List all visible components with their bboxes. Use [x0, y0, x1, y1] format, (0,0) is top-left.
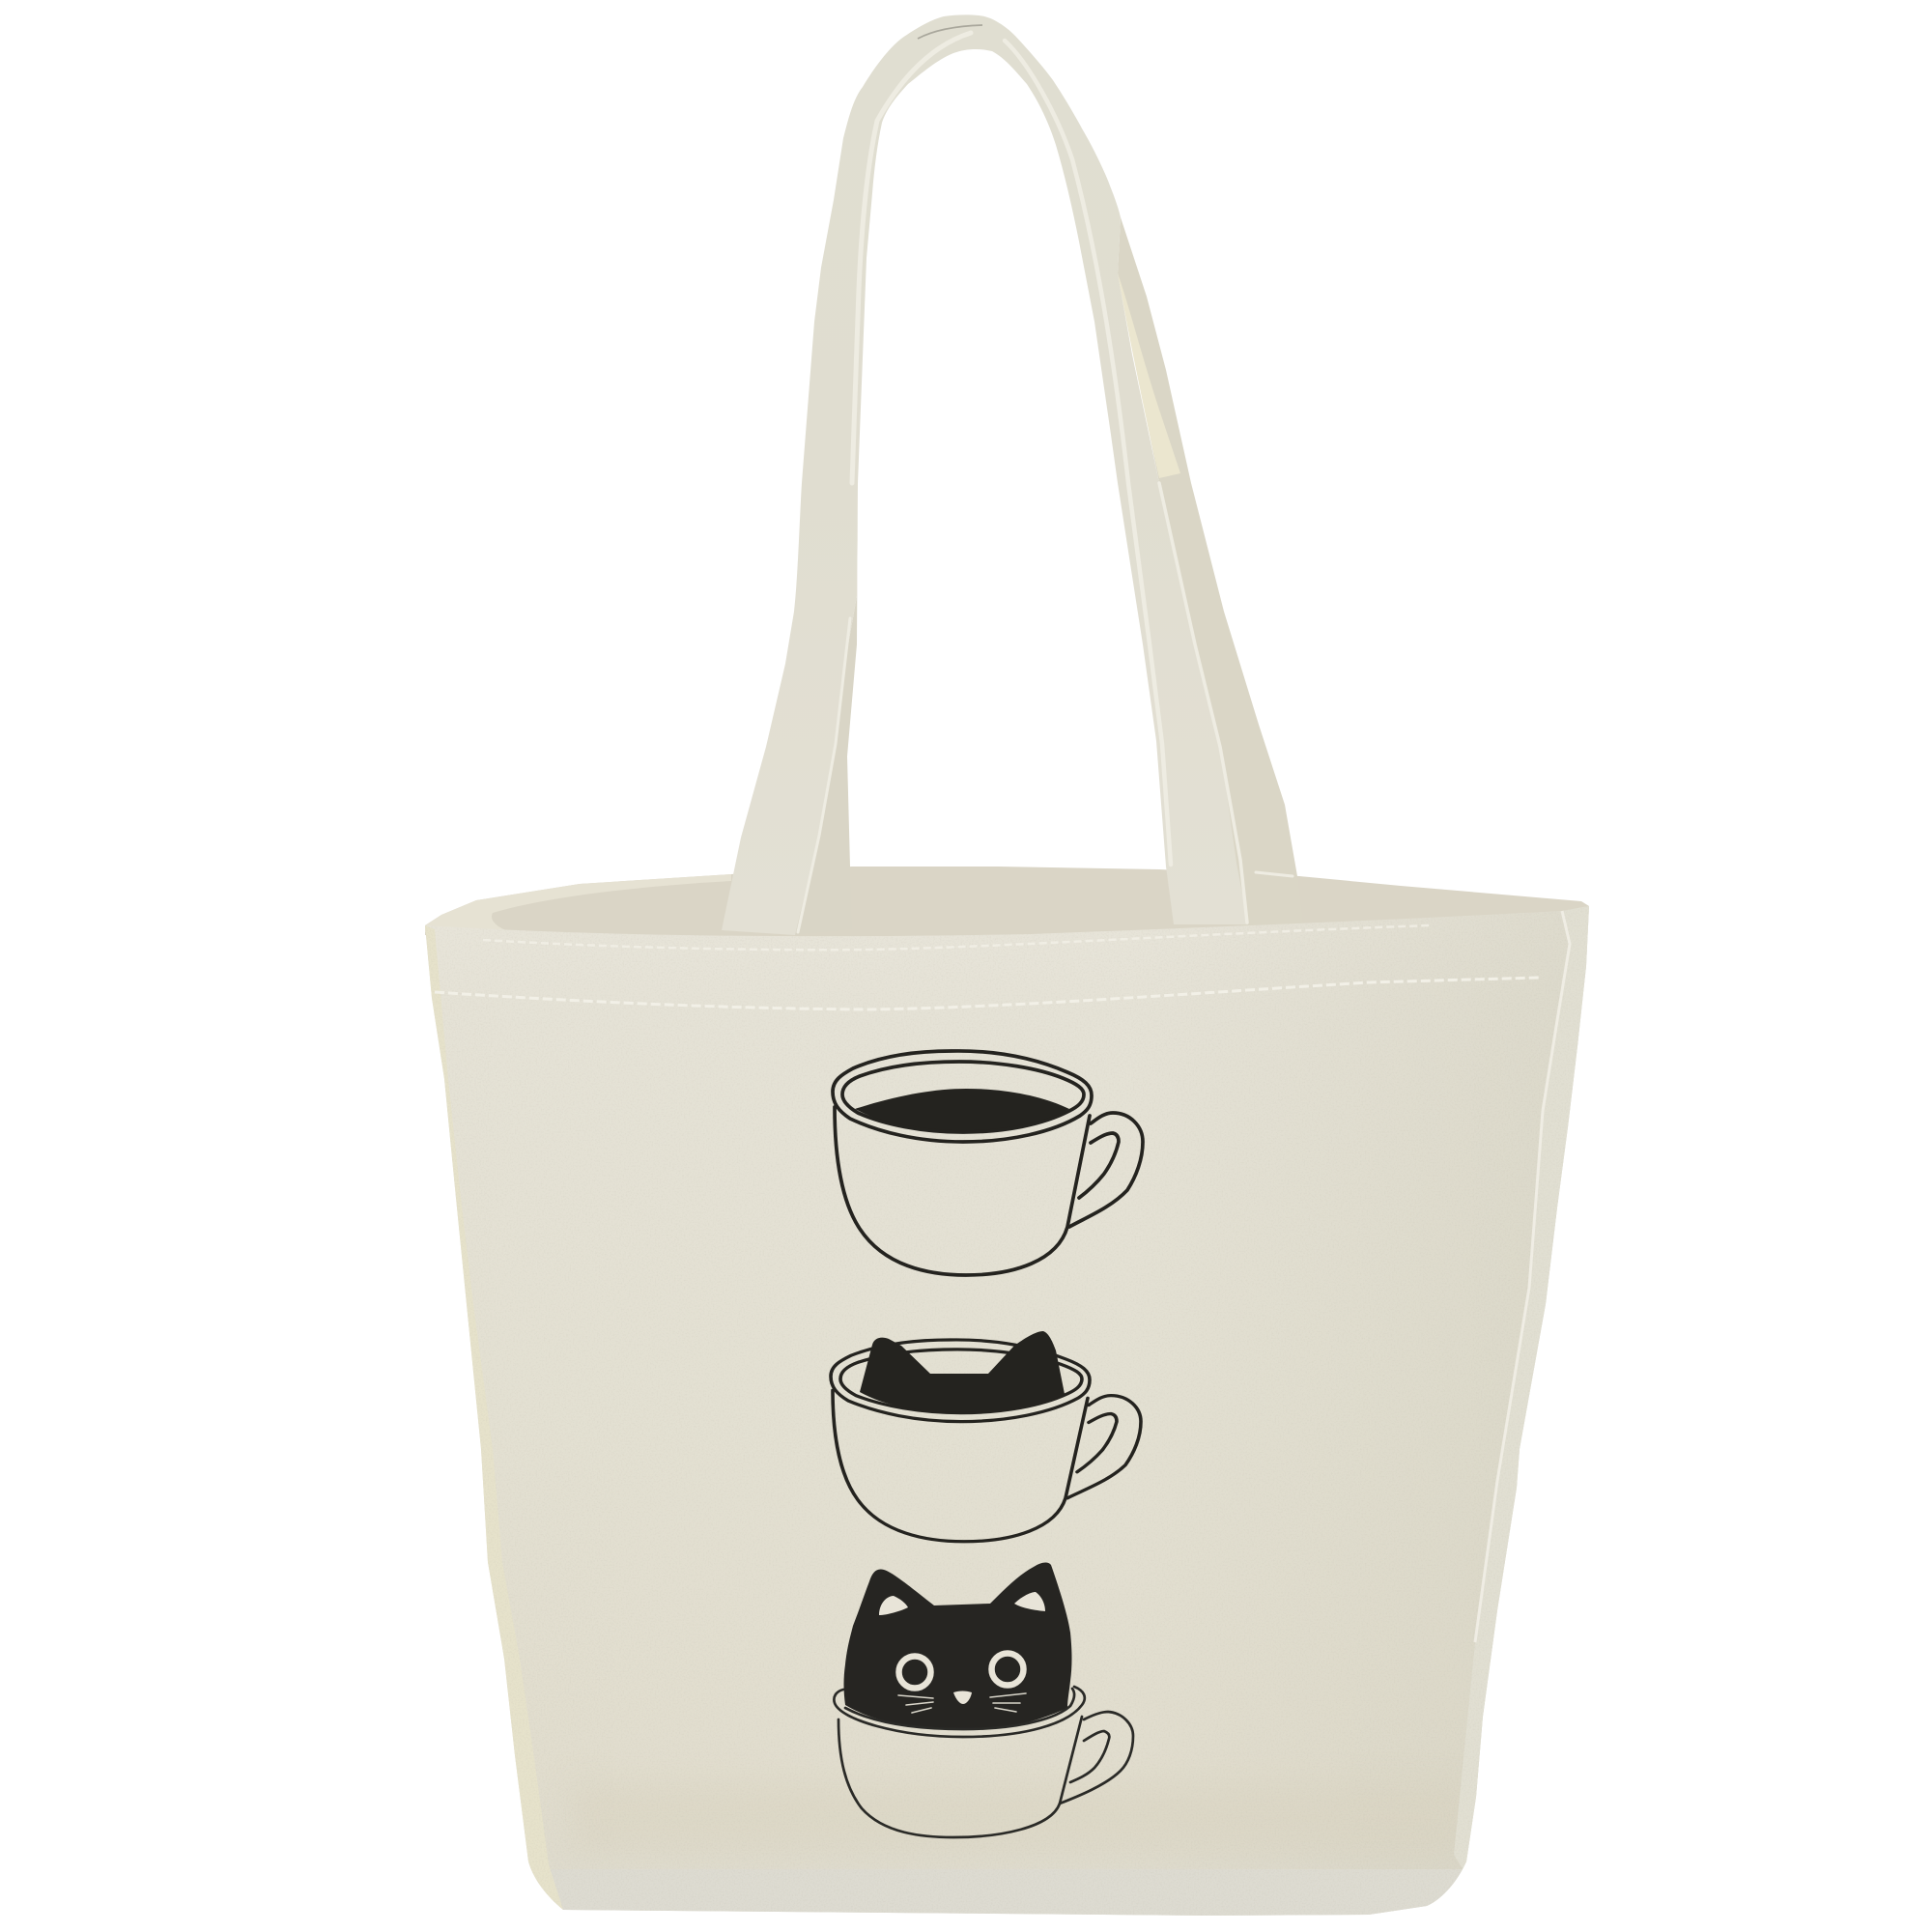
- icon: coffee cup one: [833, 1051, 1143, 1275]
- handle: top seam: [918, 25, 982, 39]
- handle: back strap right: [1118, 217, 1303, 925]
- handle: front strap: [722, 14, 1248, 935]
- bag side shading: [415, 898, 1604, 1922]
- interior cream hem: [425, 874, 731, 933]
- fabric texture: [415, 898, 1604, 1922]
- bag interior back wall: [425, 867, 1589, 942]
- cat nose: [953, 1690, 972, 1704]
- bag front panel: [425, 906, 1589, 1916]
- cat eyes: [898, 1654, 1024, 1689]
- bottom hem: [551, 1869, 1478, 1918]
- cat whiskers: [898, 1693, 1026, 1713]
- handle: inside lining: [1118, 273, 1180, 478]
- cat ears inner: [879, 1592, 1045, 1615]
- cup rim inner: [842, 1062, 1084, 1132]
- cup rim outer: [833, 1051, 1092, 1142]
- cup body and handle: [833, 1390, 1141, 1542]
- bag stitching: [435, 911, 1570, 1642]
- icon: coffee cup two with cat ears: [831, 1331, 1141, 1542]
- left cream edge: [415, 925, 563, 1910]
- cup handle: [1069, 1113, 1143, 1227]
- cup outline: [834, 1687, 1133, 1837]
- cat head: [844, 1563, 1072, 1730]
- cat ears: [860, 1331, 1065, 1412]
- illustration: canvas tote bag with cat and coffee cups: [425, 14, 1589, 1916]
- coffee fill: [855, 1089, 1069, 1132]
- icon: coffee cup three with cat: [834, 1563, 1133, 1837]
- tan glow above bottom hem: [570, 1782, 1468, 1855]
- cup rim: [831, 1340, 1090, 1422]
- handle: stitching: [798, 33, 1293, 932]
- right gusset: [1454, 906, 1589, 1868]
- cup body: [835, 1107, 1090, 1275]
- handle: back strap left: [795, 483, 858, 935]
